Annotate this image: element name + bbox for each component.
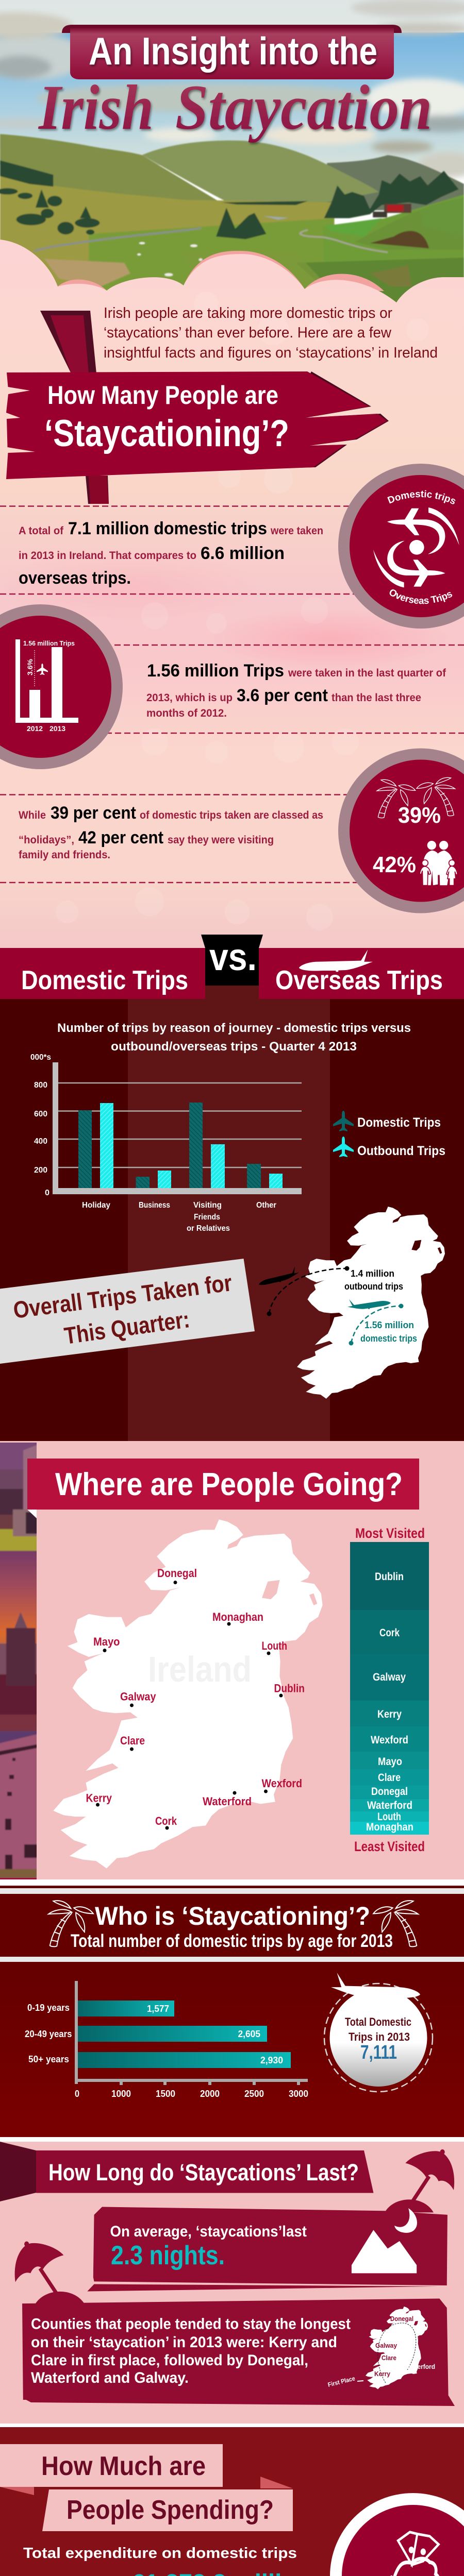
intro text: insightful facts and figures on ‘staycations’ in Ireland xyxy=(104,345,438,361)
chart legend xyxy=(333,1111,445,1158)
panel: who is staycationing background xyxy=(0,1886,464,2137)
callout: longest stays: Clare in first place, followed by Donegal, xyxy=(31,2352,308,2369)
mini map: longest stays: Kerry xyxy=(374,2370,391,2378)
header bar: overseas trips: Overseas Trips xyxy=(275,965,443,995)
title line 1: An Insight into the xyxy=(89,29,377,73)
circle icon: mini bar chart: 1.56 million Trips xyxy=(23,640,75,647)
header bar: domestic trips xyxy=(0,948,205,999)
map: ireland with counties xyxy=(53,1519,323,1869)
map: ireland with counties: Ireland xyxy=(148,1649,252,1689)
callout: longest stays: on their ‘staycation’ in 2013 were: Kerry and xyxy=(31,2334,337,2351)
bar chart: trips by age: 2000 xyxy=(200,2089,220,2099)
mini map: longest stays: Clare xyxy=(382,2354,396,2362)
map: overall trips taken: 1.56 million xyxy=(364,1320,414,1330)
fact text: last quarter xyxy=(146,661,446,719)
fact text: total trips: overseas trips. xyxy=(19,568,131,588)
circle icon: mini bar chart: 2012 xyxy=(27,724,43,733)
total badge: 7,111: Total Domestic xyxy=(345,2015,411,2028)
fact text: last quarter: 1.56 million Trips xyxy=(147,661,284,681)
ranking stack: most to least visited xyxy=(350,1526,429,1854)
mini map: longest stays: First Place xyxy=(327,2375,356,2388)
heading ribbon: how long xyxy=(0,2142,373,2201)
fact text: last quarter: were taken in the last quarter of xyxy=(288,667,446,679)
ranking stack: most to least visited: Most Visited xyxy=(355,1526,425,1541)
mini map: longest stays xyxy=(327,2307,435,2389)
fact text: total trips: 6.6 million xyxy=(201,544,285,563)
callout: average nights: 2.3 nights. xyxy=(111,2241,225,2270)
fact text: last quarter: 2013, which is up xyxy=(146,692,233,704)
bar chart: trips by age: 1,577 xyxy=(147,2004,169,2014)
ribbon: overall trips: This Quarter: xyxy=(62,1306,191,1349)
panel: spending background xyxy=(0,2424,464,2576)
chart title xyxy=(57,1021,411,1054)
callout: longest stays: Counties that people tended to stay the longest xyxy=(31,2315,351,2333)
ranking stack: most to least visited: Waterford xyxy=(367,1800,412,1811)
ranking stack: most to least visited: Mayo xyxy=(378,1756,402,1768)
heading ribbon: how long: How Long do ‘Staycations’ Last? xyxy=(48,2159,359,2185)
callout: longest stays: Waterford and Galway. xyxy=(31,2369,189,2386)
bar chart: trips by age: 2500 xyxy=(244,2089,264,2099)
bar chart: trips by age: 1000 xyxy=(111,2089,131,2099)
fact text: holidays vs visiting: of domestic trips taken are classed as xyxy=(140,809,323,821)
bar chart: trips by reason: 800 xyxy=(34,1081,47,1090)
heading ribbon: how much are people spending xyxy=(0,2444,293,2531)
fact text: last quarter: 3.6 per cent xyxy=(237,686,328,705)
mini map: longest stays: Galway xyxy=(375,2342,397,2349)
spending text: total: Total expenditure on domestic trips xyxy=(23,2545,297,2562)
salmon cloud edges xyxy=(58,251,384,291)
heading banner: where are people going: Where are People Going? xyxy=(55,1467,403,1502)
callout: average nights: On average, ‘staycations’last xyxy=(110,2223,307,2240)
signpost: ‘Staycationing’? xyxy=(44,413,289,454)
bar chart: trips by reason: Business xyxy=(139,1201,170,1210)
chart legend: Outbound Trips xyxy=(357,1144,445,1158)
chart legend: Domestic Trips xyxy=(357,1115,441,1130)
panel: domestic vs overseas background xyxy=(0,948,464,1441)
heading: who is staycationing: Who is ‘Staycationing’? xyxy=(95,1902,370,1930)
mini map: longest stays: Donegal xyxy=(390,2315,413,2323)
map: ireland with counties: Mayo xyxy=(93,1635,120,1648)
vs badge: vs. xyxy=(209,936,257,978)
circle icon: holidays and family: 39% xyxy=(398,803,441,828)
bar chart: trips by reason xyxy=(30,1053,302,1233)
icon: umbrella left xyxy=(15,2242,85,2304)
ranking stack: most to least visited: Galway xyxy=(373,1671,406,1683)
map: ireland with counties: Cork xyxy=(155,1815,177,1827)
fact text: total trips: in 2013 in Ireland. That compares to xyxy=(19,550,196,562)
header bar: overseas trips xyxy=(259,948,464,999)
ribbon: overall trips: Overall Trips Taken for xyxy=(12,1269,234,1324)
fact text: total trips xyxy=(19,519,323,588)
ranking stack: most to least visited: Monaghan xyxy=(366,1821,413,1833)
circle icon: holidays and family: 42% xyxy=(373,852,416,877)
intro text: Irish people are taking more domestic trips or xyxy=(104,305,392,321)
circle icon: domestic and overseas trips xyxy=(338,464,464,629)
heading banner: where are people going xyxy=(27,1459,419,1518)
ranking stack: most to least visited: Dublin xyxy=(375,1571,404,1583)
fact text: holidays vs visiting: “holidays”, xyxy=(19,834,74,846)
bar chart: trips by age: 2,605 xyxy=(238,2029,260,2039)
bar chart: trips by age: 0 xyxy=(75,2089,79,2099)
icon: umbrella right xyxy=(385,2149,454,2212)
bar chart: trips by age: 1500 xyxy=(156,2089,175,2099)
script title xyxy=(38,72,432,143)
mini map: longest stays: Waterford xyxy=(406,2363,435,2370)
map: overall trips taken xyxy=(257,1207,445,1399)
fact text: last quarter: months of 2012. xyxy=(146,707,227,719)
bar chart: trips by age: 50+ years xyxy=(28,2054,69,2064)
fact text: holidays vs visiting: say they were visiting xyxy=(168,834,274,846)
fact text: holidays vs visiting: While xyxy=(19,809,46,821)
panel: where are people going background xyxy=(0,1441,464,1879)
fact dashed rules xyxy=(0,506,464,883)
fact text: holidays vs visiting: family and friends. xyxy=(19,849,110,861)
bar chart: trips by reason: Visiting xyxy=(193,1201,222,1210)
bar chart: trips by age: 3000 xyxy=(289,2089,308,2099)
ribbon: overall trips xyxy=(0,1259,255,1364)
bar chart: trips by reason: 000*s xyxy=(30,1053,51,1062)
bar chart: trips by age: 2,930 xyxy=(260,2055,283,2065)
heading ribbon: how much are people spending: How Much are xyxy=(41,2451,206,2481)
callout: longest stays xyxy=(15,2242,455,2406)
bar chart: trips by reason: or Relatives xyxy=(187,1224,230,1233)
bar chart: trips by reason: Other xyxy=(256,1201,276,1210)
callout: average nights xyxy=(87,2149,454,2292)
map: ireland with counties: Clare xyxy=(120,1734,145,1747)
circle icon: hand with money xyxy=(330,2493,464,2576)
fact text: total trips: A total of xyxy=(19,525,64,537)
bar chart: trips by reason: Friends xyxy=(194,1213,220,1222)
signpost xyxy=(6,311,389,504)
bar chart: trips by age xyxy=(25,1981,308,2099)
photo strip: castles xyxy=(0,1440,39,1880)
ranking stack: most to least visited: Wexford xyxy=(371,1734,408,1746)
ranking stack: most to least visited: Louth xyxy=(377,1811,401,1823)
circle icon: mini bar chart: 2013 xyxy=(49,724,65,733)
map: ireland with counties: Donegal xyxy=(157,1567,197,1580)
map: ireland with counties: Monaghan xyxy=(212,1611,263,1623)
map: ireland with counties: Waterford xyxy=(203,1795,252,1808)
ranking stack: most to least visited: Cork xyxy=(379,1627,400,1639)
circle icon: mini bar chart: 3.6% xyxy=(26,658,34,675)
bar chart: trips by reason: 0 xyxy=(45,1189,49,1197)
intro text xyxy=(104,305,438,361)
ranking stack: most to least visited: Donegal xyxy=(371,1786,408,1798)
pink cloud background panel xyxy=(0,237,464,951)
script title: Irish xyxy=(38,72,154,143)
bar chart: trips by reason: 200 xyxy=(34,1166,47,1175)
total badge: 7,111 xyxy=(324,1973,433,2092)
heading: who is staycationing xyxy=(48,1901,418,1951)
label: domestic trips: Domestic trips xyxy=(387,490,456,504)
heading ribbon: how much are people spending: People Spending? xyxy=(67,2495,274,2525)
spending text: total xyxy=(23,2545,318,2576)
total badge: 7,111: 7,111 xyxy=(360,2042,397,2063)
header bar: domestic trips: Domestic Trips xyxy=(21,965,188,995)
bar chart: trips by reason: 600 xyxy=(34,1110,47,1118)
bar chart: trips by age: 20-49 years xyxy=(25,2029,72,2039)
script title: Staycation xyxy=(175,72,432,143)
ranking stack: most to least visited: Least Visited xyxy=(354,1839,425,1854)
map: ireland with counties: Galway xyxy=(120,1690,156,1703)
total badge: 7,111: Trips in 2013 xyxy=(349,2030,410,2043)
hero landscape photo xyxy=(0,0,464,315)
title banner xyxy=(62,25,402,79)
sign heading: How Many People are xyxy=(47,381,278,410)
intro text: ‘staycations’ than ever before. Here are a few xyxy=(104,325,392,341)
bar chart: trips by reason: 400 xyxy=(34,1137,47,1146)
ranking stack: most to least visited: Kerry xyxy=(377,1708,402,1720)
chart title: outbound/overseas trips - Quarter 4 2013 xyxy=(111,1040,357,1054)
map: overall trips taken: domestic trips xyxy=(360,1333,417,1344)
label: overseas trips: Overseas Trips xyxy=(390,589,453,604)
map: ireland with counties: Louth xyxy=(262,1639,287,1652)
circle icon: mini bar chart xyxy=(0,604,123,769)
circle icon: holidays and family xyxy=(338,748,464,913)
fact text: last quarter: than the last three xyxy=(332,692,421,704)
heading: who is staycationing: Total number of domestic trips by age for 2013 xyxy=(71,1931,393,1951)
map: ireland with counties: Dublin xyxy=(274,1682,305,1695)
chart title: Number of trips by reason of journey - domestic trips versus xyxy=(57,1021,411,1035)
fact text: holidays vs visiting xyxy=(19,803,323,861)
map: ireland with counties: Kerry xyxy=(86,1792,112,1804)
fact text: total trips: 7.1 million domestic trips xyxy=(68,519,267,538)
fact text: holidays vs visiting: 42 per cent xyxy=(78,828,163,848)
map: overall trips taken: 1.4 million xyxy=(351,1268,394,1279)
fact text: total trips: were taken xyxy=(270,525,323,537)
bar chart: trips by reason: Holiday xyxy=(82,1201,110,1210)
map: overall trips taken: outbound trips xyxy=(344,1281,403,1292)
fact text: holidays vs visiting: 39 per cent xyxy=(51,803,136,823)
bar chart: trips by age: 0-19 years xyxy=(27,2003,70,2013)
map: ireland with counties: Wexford xyxy=(262,1777,302,1790)
panel: how long background xyxy=(0,2142,464,2424)
ranking stack: most to least visited: Clare xyxy=(378,1772,401,1784)
